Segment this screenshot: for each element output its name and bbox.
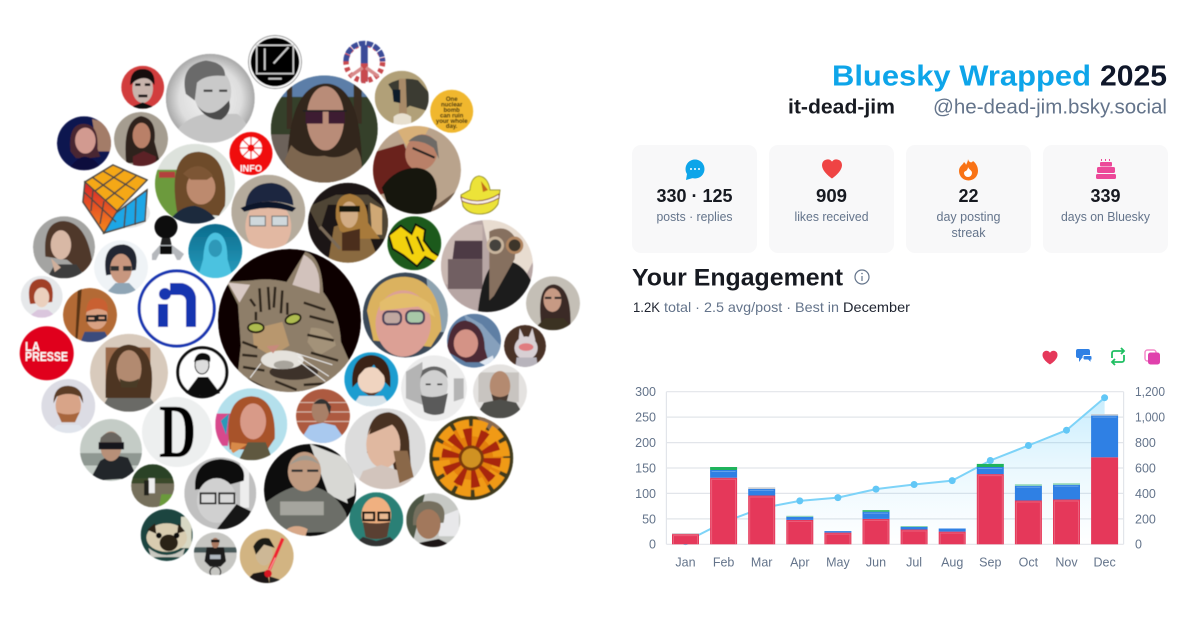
- icon: legend reposts: [1112, 348, 1124, 365]
- avatar: cartoon man long hair: [344, 352, 398, 406]
- avatar: pug: [141, 509, 193, 561]
- month labels: Aug: [941, 556, 963, 570]
- bar: Aug: [939, 528, 966, 544]
- bar: Apr: [786, 516, 813, 544]
- bar: Dec: [1091, 414, 1118, 544]
- stat value: 909: [816, 186, 847, 206]
- stat label: [936, 209, 1000, 240]
- engagement summary: December: [843, 299, 910, 315]
- avatar: cyclist: [194, 532, 237, 577]
- avatar: nuclear bomb button: One: [446, 97, 458, 103]
- left axis labels: [635, 385, 656, 552]
- avatar: pencil sketch man: [166, 54, 255, 143]
- avatar: woman in beret: [184, 457, 256, 529]
- avatar: woman with sunglasses: [271, 76, 378, 182]
- month labels: Apr: [790, 556, 810, 570]
- month labels: Feb: [713, 556, 734, 570]
- stacked bars: [672, 414, 1118, 544]
- avatar: red poster man: [121, 66, 164, 109]
- month labels: Dec: [1093, 556, 1116, 570]
- stat label: days on Bluesky: [1061, 209, 1150, 224]
- stat card: likes: [769, 145, 894, 253]
- month labels: Mar: [751, 556, 772, 570]
- icon: legend replies: [1076, 349, 1092, 363]
- left axis labels: 150: [635, 461, 656, 475]
- line markers: [682, 394, 1108, 545]
- avatar: woman with curly brown hair: [155, 144, 235, 224]
- avatar: landscape figure: [131, 464, 174, 507]
- avatar: CBC info logo: [230, 132, 272, 175]
- avatar: in logo: [139, 271, 214, 346]
- engagement summary: total · 2.5 avg/post · Best in: [664, 299, 839, 315]
- avatar: Lincoln logo: [178, 348, 227, 397]
- avatar: red-haired woman: [215, 388, 287, 460]
- stat value: 330 · 125: [656, 186, 732, 206]
- avatar: bald man in grey polo: [473, 364, 527, 418]
- bar: Jun: [862, 510, 890, 544]
- avatar: Big Bird yellow drawing: [461, 176, 500, 214]
- avatar: woman beige hair: [345, 408, 426, 489]
- avatar: man with orange background: [63, 288, 117, 342]
- bar: Mar: [748, 487, 775, 544]
- chart legend: [1042, 348, 1160, 365]
- avatar: man grey hair: [406, 493, 460, 547]
- stat label: day posting: [936, 209, 1000, 224]
- handle: @he-dead-jim.bsky.social: [933, 96, 1167, 118]
- right axis labels: 1,200: [1135, 385, 1165, 399]
- stat label: likes received: [794, 209, 868, 224]
- avatar: bald cartoon with beard: [349, 492, 403, 546]
- title: Bluesky Wrapped: [832, 61, 1091, 93]
- bar: Nov: [1053, 483, 1080, 544]
- icon: legend quotes: [1145, 350, 1160, 364]
- right axis labels: 0: [1135, 538, 1142, 552]
- avatar: plague doctor mask: [441, 220, 533, 312]
- avatar: man with dog: [373, 126, 461, 214]
- avatar: blue hoodie: [188, 224, 242, 278]
- title year: 2025: [1100, 61, 1167, 93]
- cumulative area: [686, 398, 1105, 544]
- icon: info: [855, 270, 869, 284]
- avatar: long-haired man: [90, 334, 168, 412]
- month labels: Nov: [1055, 556, 1078, 570]
- icon: flame: [959, 159, 978, 180]
- right axis labels: 1,000: [1135, 410, 1165, 424]
- engagement summary: 1.2K: [633, 299, 661, 315]
- right axis labels: 400: [1135, 487, 1156, 501]
- avatar: green and yellow logo: [387, 216, 441, 270]
- stat label: posts · replies: [656, 209, 733, 224]
- avatar: lightsaber cartoon: [240, 529, 294, 583]
- bar: Jul: [901, 526, 928, 544]
- right axis labels: 600: [1135, 461, 1156, 475]
- avatar: toy creature: [504, 325, 546, 367]
- avatar: cartoon redhead: [21, 276, 63, 318]
- bar: Oct: [1015, 484, 1042, 544]
- icon: cake: [1096, 159, 1116, 179]
- avatar: woman with glasses right: [526, 276, 580, 330]
- month labels: [675, 556, 1116, 570]
- avatar: La Presse logo: [20, 326, 74, 380]
- stat value: 22: [958, 186, 978, 206]
- chart grid and axes: [666, 392, 1124, 544]
- avatar: tabby cat: [218, 249, 361, 392]
- avatar: ink sketch bearded man: [401, 355, 467, 421]
- left axis labels: 0: [649, 538, 656, 552]
- bar: May: [824, 531, 851, 544]
- month labels: Jun: [866, 556, 886, 570]
- avatar: man with cap and glasses: [231, 175, 305, 253]
- icon: chat bubble: [686, 160, 704, 180]
- left axis labels: 100: [635, 487, 656, 501]
- avatar: rocket diagram logo: [248, 35, 302, 89]
- month labels: Jan: [675, 556, 696, 570]
- avatar: bearded lion driver: [308, 183, 388, 263]
- heading: Your Engagement: Your Engagement: [632, 265, 843, 292]
- display name: it-dead-jim: [788, 96, 895, 118]
- avatar: sunglasses on beach: [80, 419, 142, 481]
- left axis labels: 300: [635, 385, 656, 399]
- right axis labels: 200: [1135, 512, 1156, 526]
- stat label: streak: [952, 225, 986, 240]
- engagement chart: [635, 385, 1165, 570]
- stat card: posts and replies: [632, 145, 757, 253]
- avatar: woman with long dark hair: [114, 112, 168, 166]
- month labels: May: [826, 556, 850, 570]
- avatar: woman on navy background: [57, 116, 111, 170]
- avatar: illustrated man with glasses: [94, 240, 148, 294]
- left axis labels: 250: [635, 410, 656, 424]
- month labels: Sep: [979, 556, 1001, 570]
- month labels: Jul: [906, 556, 922, 570]
- stat card: streak: [906, 145, 1031, 253]
- avatar: man at brick wall: [296, 389, 350, 443]
- right axis labels: 800: [1135, 436, 1156, 450]
- avatar: astronaut robot: [152, 216, 184, 260]
- avatar: CBC info logo: INFO: [240, 164, 262, 174]
- icon: legend heart: [1042, 351, 1058, 364]
- avatar: nuclear bomb button: nuclear: [441, 102, 463, 108]
- month labels: Oct: [1019, 556, 1039, 570]
- avatar: letter D logo: D: [159, 390, 196, 474]
- avatar cluster: [20, 35, 580, 583]
- avatar: nuclear bomb button: day.: [446, 124, 458, 130]
- icon: heart: [822, 159, 842, 178]
- left axis labels: 200: [635, 436, 656, 450]
- avatar: La Presse logo: PRESSE: [25, 349, 68, 364]
- avatar: woman with grey background: [33, 216, 95, 278]
- avatar: nuclear bomb button: can ruin: [440, 114, 464, 120]
- right axis labels: [1135, 385, 1165, 552]
- bar: Feb: [710, 467, 737, 544]
- bar: Jan: [672, 533, 699, 544]
- avatar: Rubik's cube: [83, 165, 150, 233]
- avatar: peace sign flag: [346, 43, 383, 82]
- cumulative line: [686, 398, 1105, 542]
- stat card: days on Bluesky: [1043, 145, 1168, 253]
- avatar: nuclear bomb button: bomb: [444, 108, 460, 114]
- avatar: La Presse logo: LA: [25, 339, 41, 354]
- avatar: nuclear bomb button: your whole: [436, 119, 468, 125]
- avatar: doodle sand: [375, 71, 429, 125]
- avatar: nuclear bomb button: [430, 90, 473, 133]
- avatar: blonde woman with glasses: [363, 272, 448, 358]
- left axis labels: 50: [642, 512, 656, 526]
- bar: Sep: [977, 464, 1004, 544]
- avatar: smiling man: [41, 379, 95, 433]
- stat value: 339: [1090, 186, 1120, 206]
- avatar: woman blue trees: [447, 314, 501, 368]
- avatar: orange gazania flower: [429, 416, 513, 500]
- avatar: man in grey t-shirt: [264, 444, 356, 536]
- engagement summary: [633, 299, 910, 315]
